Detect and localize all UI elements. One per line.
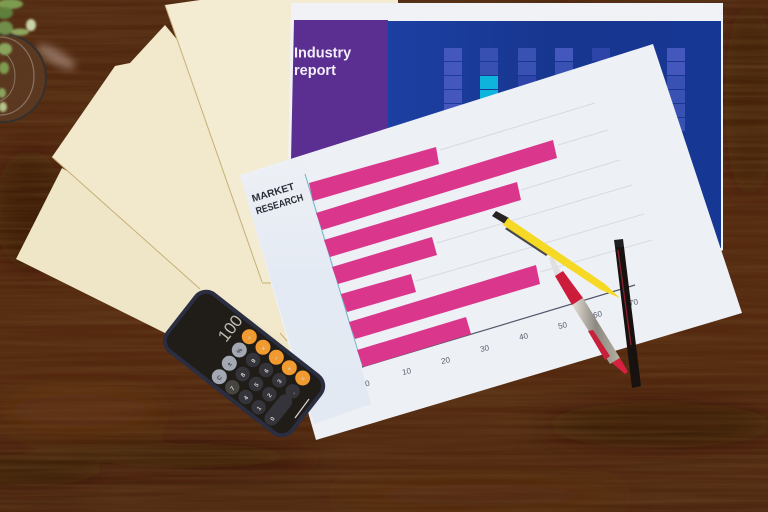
folder: top [165,0,398,282]
pencil shadow [505,225,552,256]
axis tick labels: 10 [401,366,412,377]
key labels: C [217,374,224,382]
bar chart [309,140,557,367]
folder: bottom [16,168,292,352]
axis tick labels: 20 [440,355,451,366]
key labels: 3 [277,378,284,385]
purple report panel [291,20,388,160]
key labels: 1 [256,405,264,412]
key labels: 8 [240,372,248,379]
sheet heading [251,181,305,217]
phone screen [162,289,326,438]
home indicator [295,399,309,418]
axis tick labels: 60 [592,309,603,320]
sheet label panel [240,157,371,424]
axis tick labels: 0 [364,379,371,389]
calculator phone [157,284,331,443]
report heading: Industry [294,46,351,62]
axis tick labels: 50 [557,320,568,331]
key labels: + [287,366,294,373]
axis tick labels: 70 [628,297,639,308]
sheet heading: RESEARCH [255,193,305,217]
key labels: . [291,390,297,395]
report sheet behind [288,3,723,300]
grey function keys [212,342,247,384]
key labels: 9 [251,358,258,365]
key labels: ± [227,361,234,368]
blue chart panel [388,21,721,248]
calculator display: 100 [214,311,247,345]
key labels: 5 [254,382,261,389]
yellow pencil [492,211,620,298]
key labels: 0 [270,416,277,423]
sheet heading: MARKET [251,181,296,205]
market research sheet [240,44,742,440]
key labels: 7 [230,385,237,392]
report heading: report [294,63,336,79]
key labels: 4 [243,395,251,402]
axis tick labels: 30 [479,343,490,354]
key labels [217,335,307,423]
key labels: % [236,347,245,355]
black pen [614,239,641,388]
report bar columns [444,48,685,131]
red and silver pen [549,257,628,374]
key labels: 6 [264,368,271,375]
axis tick labels [364,297,639,389]
key labels: ÷ [247,335,254,342]
key labels: × [261,345,268,352]
grid lines [416,103,652,281]
phone body [157,284,331,443]
axis tick labels: 40 [518,331,529,342]
glass jar [0,33,47,123]
folder edges [52,5,287,341]
plant leaves [0,0,36,112]
orange operator keys [242,329,310,386]
dark digit keys [225,353,300,418]
chart axis [305,174,635,368]
key labels: = [300,376,307,383]
key labels: − [274,355,281,362]
key labels: 2 [267,392,274,399]
folder: middle with tab [52,25,310,350]
